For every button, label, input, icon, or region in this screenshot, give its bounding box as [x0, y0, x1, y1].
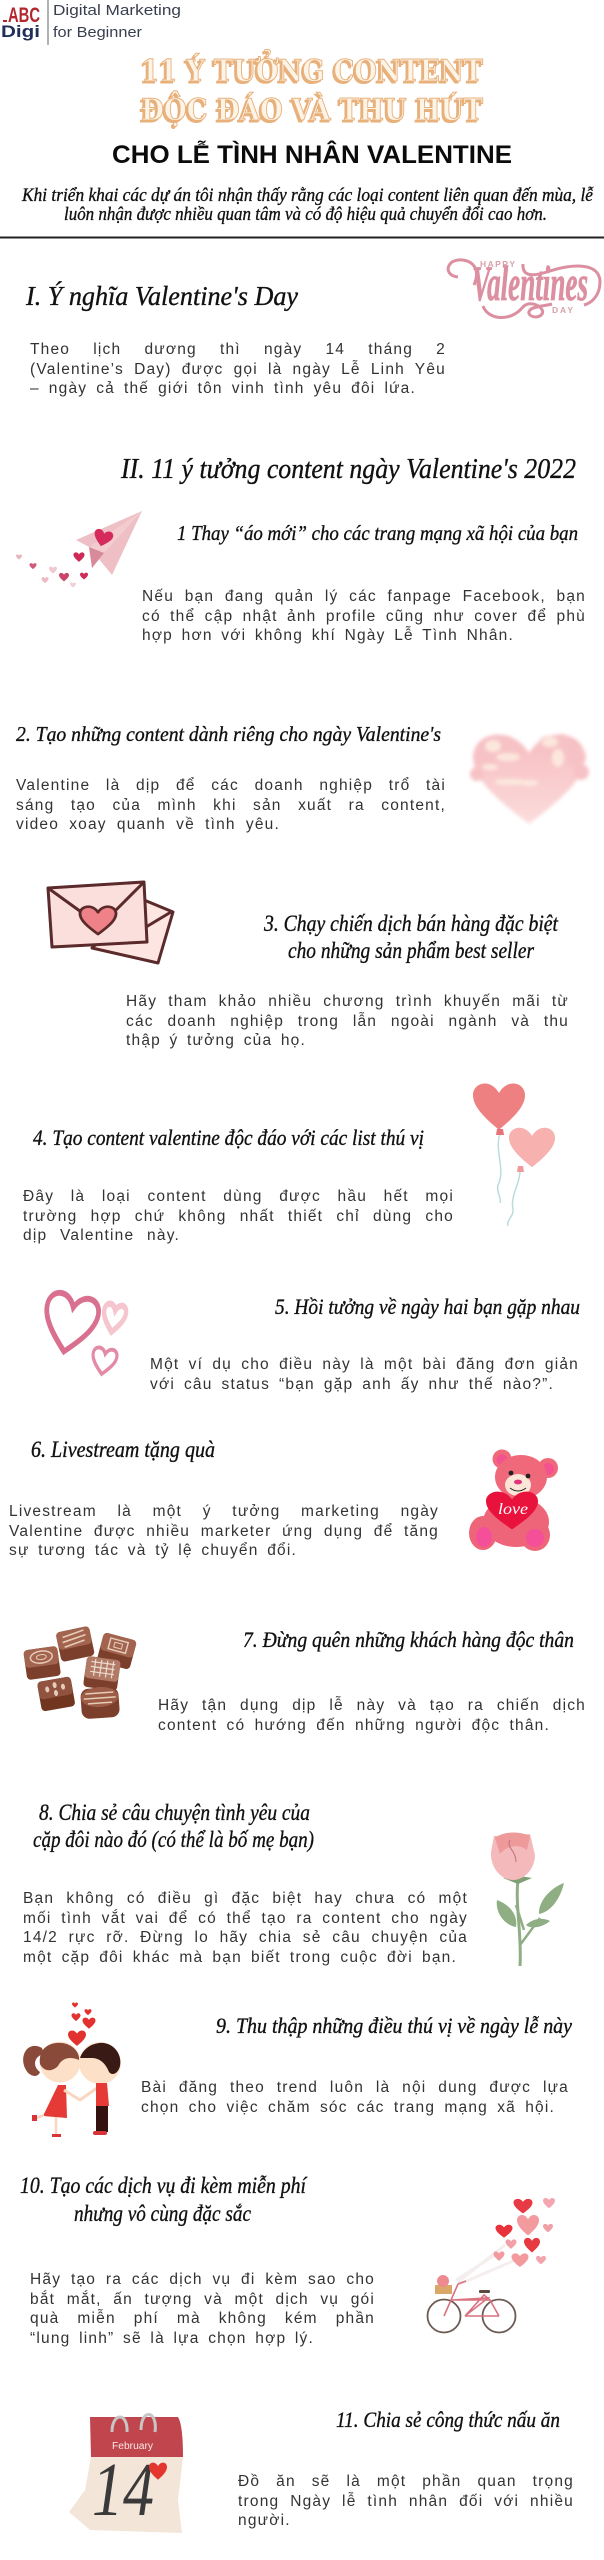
- heading 3: [263, 911, 559, 963]
- icon: calendar February 14: February: [112, 2441, 153, 2452]
- text block: idea 3: các doanh nghiệp trong lẫn ngoài ngành và thu: [126, 1013, 569, 1030]
- text block: idea 8: 14/2 rực rỡ. Đừng lo hãy chia sẻ câu chuyện của: [23, 1929, 468, 1946]
- icon: happy valentines lettering: HAPPY: [480, 259, 515, 269]
- text block: idea 2: [16, 777, 446, 833]
- header rule: [0, 236, 604, 238]
- subtitle: cho lễ tình nhân valentine: CHO LỄ TÌNH NHÂN VALENTINE: [112, 139, 512, 169]
- icon: happy valentines lettering: DAY: [552, 305, 573, 315]
- text block: idea 8: một cặp đôi khác mà bạn biết trong cuộc đời bạn.: [23, 1949, 457, 1966]
- title: 11 ý tưởng content độc đáo và thu hút: 11 Ý TƯỞNG CONTENT: [141, 49, 484, 89]
- heading 10: [20, 2173, 308, 2226]
- icon: outline hearts: [39, 1291, 127, 1376]
- text block: idea 2: sáng tạo của mình khi sản xuất ra content,: [16, 797, 446, 814]
- icon: teddy bear with heart: love: [498, 1501, 528, 1518]
- logo: ABC Digi: Digital Marketing: [53, 2, 181, 19]
- title: 11 ý tưởng content độc đáo và thu hút: ĐỘC ĐÁO VÀ THU HÚT: [141, 90, 484, 128]
- icon: teddy bear with heart: [469, 1450, 558, 1551]
- text block: idea 6: Livestream là một ý tưởng marketing ngày: [9, 1503, 439, 1520]
- text block: idea 11: người.: [238, 2512, 291, 2529]
- text block: idea 9: Bài đăng theo trend luôn là nội dung được lựa: [141, 2079, 569, 2096]
- text block: idea 8: Bạn không có điều gì đặc biệt hay chưa có một: [23, 1890, 468, 1907]
- text block: idea 7: content có hướng đến những người độc thân.: [158, 1717, 550, 1734]
- text block: idea 9: chọn cho việc chăm sóc các trang mạng xã hội.: [141, 2099, 555, 2116]
- text block: idea 4: dịp Valentine này.: [23, 1227, 180, 1244]
- heading II: II. 11 ý tưởng content ngày Valentine's 2022: [120, 454, 576, 485]
- icon: cloud heart: [470, 734, 589, 824]
- icon: calendar February 14: [69, 2414, 183, 2533]
- logo: ABC Digi: for Beginner: [53, 24, 142, 41]
- text block: idea 5: Một ví dụ cho điều này là một bài đăng đơn giản: [150, 1356, 579, 1373]
- heading 10: nhưng vô cùng đặc sắc: [74, 2201, 251, 2226]
- text block: idea 6: Valentine được nhiều marketer ứng dụng để tăng: [9, 1523, 439, 1540]
- text block: idea 10: quà miễn phí mà không kém phần: [30, 2310, 375, 2327]
- text block: idea 5: [150, 1356, 579, 1393]
- heading 4: 4. Tạo content valentine độc đáo với các list thú vị: [33, 1125, 424, 1150]
- text block: meaning of Valentine: [30, 341, 446, 397]
- heading 3: 3. Chạy chiến dịch bán hàng đặc biệt: [263, 911, 559, 936]
- heading 3: cho những sản phẩm best seller: [288, 938, 535, 963]
- text block: idea 1: hợp hơn với không khí Ngày Lễ Tình Nhân.: [142, 627, 514, 644]
- heading 11: 11. Chia sẻ công thức nấu ăn: [336, 2407, 560, 2432]
- text block: meaning of Valentine: Theo lịch dương thì ngày 14 tháng 2: [30, 341, 446, 358]
- text block: idea 1: [142, 588, 586, 644]
- text block: idea 11: trong Ngày lễ tình nhân đối với nhiều: [238, 2493, 574, 2510]
- text block: idea 1: có thể cập nhật ảnh profile cũng như cover để phù: [142, 608, 586, 625]
- text block: idea 4: [23, 1188, 454, 1244]
- text block: idea 10: “lung linh” sẽ là lựa chọn hợp lý.: [30, 2330, 314, 2347]
- heading 7: 7. Đừng quên những khách hàng độc thân: [243, 1627, 574, 1652]
- text block: idea 3: thập ý tưởng của họ.: [126, 1032, 306, 1049]
- heading 9: 9. Thu thập những điều thú vị về ngày lễ này: [216, 2013, 572, 2038]
- icon: paper plane with hearts: [16, 511, 142, 588]
- icon: rose: [491, 1832, 564, 1966]
- icon: kissing couple: [23, 2002, 121, 2137]
- logo: ABC Digi: [1, 0, 181, 45]
- text block: idea 2: video xoay quanh về tình yêu.: [16, 816, 280, 833]
- text block: idea 10: bắt mắt, ấn tượng và một dịch vụ gói: [30, 2291, 375, 2308]
- icon: bicycle with heart balloons: [428, 2198, 555, 2332]
- text block: meaning of Valentine: – ngày cả thế giới tôn vinh tình yêu đôi lứa.: [30, 380, 416, 397]
- text block: idea 4: Đây là loại content dùng được hầu hết mọi: [23, 1188, 454, 1205]
- text block: idea 10: Hãy tạo ra các dịch vụ đi kèm sao cho: [30, 2271, 375, 2288]
- heading 2: 2. Tạo những content dành riêng cho ngày Valentine's: [16, 722, 441, 746]
- text block: idea 3: [126, 993, 569, 1049]
- logo: ABC Digi: ABC: [8, 4, 40, 27]
- text block: idea 10: [30, 2271, 375, 2347]
- heading I: I. Ý nghĩa Valentine's Day: [25, 281, 298, 311]
- heading 6: 6. Livestream tặng quà: [31, 1437, 215, 1462]
- heading 10: 10. Tạo các dịch vụ đi kèm miễn phí: [20, 2173, 308, 2198]
- text block: idea 5: với câu status “bạn gặp anh ấy như thế nào?”.: [150, 1376, 554, 1393]
- text block: idea 3: Hãy tham khảo nhiều chương trình khuyến mãi từ: [126, 993, 569, 1010]
- heading 8: [33, 1800, 314, 1852]
- icon: love letters: [48, 882, 173, 963]
- text block: idea 6: sự tương tác và tỷ lệ chuyển đổi.: [9, 1542, 297, 1559]
- intro text: [21, 185, 594, 225]
- title: 11 ý tưởng content độc đáo và thu hút: [141, 49, 484, 128]
- text block: idea 4: trường hợp chứ không nhất thiết chỉ dùng cho: [23, 1208, 454, 1225]
- logo: ABC Digi: Digi: [1, 22, 40, 41]
- text block: idea 1: Nếu bạn đang quản lý các fanpage Facebook, bạn: [142, 588, 586, 605]
- heading 8: cặp đôi nào đó (có thể là bố mẹ bạn): [33, 1827, 314, 1852]
- text block: idea 11: [238, 2473, 574, 2529]
- text block: idea 2: Valentine là dịp để các doanh nghiệp trổ tài: [16, 777, 446, 794]
- text block: idea 8: [23, 1890, 468, 1966]
- text block: meaning of Valentine: (Valentine’s Day) được gọi là ngày Lễ Linh Yêu: [30, 361, 446, 378]
- intro text: luôn nhận được nhiều quan tâm và có độ hiệu quả chuyển đổi cao hơn.: [64, 204, 547, 225]
- text block: idea 7: Hãy tận dụng dịp lễ này và tạo ra chiến dịch: [158, 1697, 586, 1714]
- text block: idea 11: Đồ ăn sẽ là một phần quan trọng: [238, 2473, 574, 2490]
- text block: idea 7: [158, 1696, 586, 1734]
- heading 8: 8. Chia sẻ câu chuyện tình yêu của: [39, 1800, 310, 1825]
- text block: idea 8: mối tình vắt vai để có thể tạo ra content cho ngày: [23, 1910, 468, 1927]
- icon: calendar February 14: 14: [92, 2448, 154, 2532]
- text block: idea 9: [141, 2079, 569, 2116]
- icon: chocolates: [23, 1626, 137, 1719]
- icon: heart balloons: [473, 1083, 555, 1226]
- text block: idea 6: [9, 1503, 439, 1559]
